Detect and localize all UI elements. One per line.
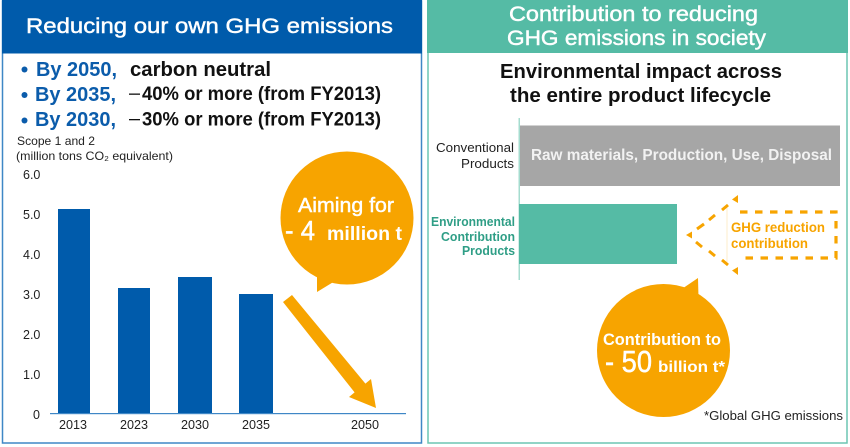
environmental contribution products bar bbox=[519, 204, 677, 264]
dashed arrow: GHG reduction contribution: GHG reduction bbox=[731, 219, 825, 235]
x axis labels bbox=[59, 418, 379, 432]
right panel heading: GHG emissions in society bbox=[507, 27, 767, 50]
callout: aiming for -4 million t: Aiming for bbox=[298, 195, 394, 217]
y axis labels: 0 bbox=[33, 408, 40, 422]
y axis labels: 5.0 bbox=[23, 208, 40, 222]
callout: contribution to -50 billion t: - 50 bbox=[605, 344, 652, 379]
dashed arrow: GHG reduction contribution: contribution bbox=[731, 235, 808, 251]
environmental contribution products label: Products bbox=[462, 244, 515, 258]
target list: By 2050, bbox=[36, 59, 117, 81]
callout: contribution to -50 billion t: billion t* bbox=[658, 359, 726, 376]
bar chart bbox=[23, 168, 406, 432]
right panel header band bbox=[427, 0, 848, 53]
y axis labels bbox=[23, 168, 40, 422]
left panel header band bbox=[2, 0, 422, 54]
conventional products label bbox=[436, 141, 514, 171]
target list bbox=[22, 59, 381, 131]
target list: By 2035, bbox=[35, 84, 116, 106]
chart unit label: Scope 1 and 2 bbox=[17, 134, 95, 148]
callout: contribution to -50 billion t bbox=[597, 278, 730, 417]
footnote: *Global GHG emissions bbox=[704, 409, 843, 423]
conventional products bar: Raw materials, Production, Use, Disposal bbox=[531, 147, 832, 164]
target list: 30% or more (from FY2013) bbox=[142, 110, 381, 130]
y axis labels: 4.0 bbox=[23, 248, 40, 262]
target list: carbon neutral bbox=[130, 59, 271, 81]
y axis labels: 1.0 bbox=[23, 368, 40, 382]
callout: aiming for -4 million t: - 4 bbox=[285, 215, 315, 246]
y axis labels: 3.0 bbox=[23, 288, 40, 302]
callout: aiming for -4 million t bbox=[280, 152, 414, 292]
lifecycle heading: the entire product lifecycle bbox=[510, 85, 771, 107]
right panel heading bbox=[507, 3, 767, 50]
x axis labels: 2030 bbox=[181, 418, 209, 432]
x axis labels: 2023 bbox=[120, 418, 148, 432]
lifecycle heading bbox=[500, 61, 782, 107]
target list: 40% or more (from FY2013) bbox=[142, 84, 381, 105]
x axis labels: 2013 bbox=[59, 418, 87, 432]
callout: aiming for -4 million t: million t bbox=[327, 224, 403, 245]
target list: By 2030, bbox=[35, 109, 116, 131]
x axis labels: 2050 bbox=[351, 418, 379, 432]
environmental contribution products label: Environmental bbox=[431, 215, 515, 229]
arrow: decline to 2050 bbox=[283, 295, 376, 408]
bars bbox=[58, 209, 273, 414]
right panel heading: Contribution to reducing bbox=[509, 3, 758, 26]
dashed arrow: GHG reduction contribution bbox=[686, 195, 836, 275]
conventional products label: Conventional bbox=[436, 141, 514, 155]
chart unit label bbox=[16, 134, 173, 163]
left panel heading: Reducing our own GHG emissions bbox=[26, 15, 393, 38]
lifecycle heading: Environmental impact across bbox=[500, 61, 782, 83]
environmental contribution products label bbox=[431, 215, 515, 258]
conventional products label: Products bbox=[461, 157, 514, 171]
environmental contribution products label: Contribution bbox=[441, 230, 515, 244]
panel: contribution to reducing GHG emissions in society bbox=[427, 0, 848, 443]
panel: reducing our own GHG emissions bbox=[2, 0, 422, 443]
y axis labels: 6.0 bbox=[23, 168, 40, 182]
y axis labels: 2.0 bbox=[23, 328, 40, 342]
conventional products bar bbox=[520, 126, 840, 186]
chart unit label: (million tons CO₂ equivalent) bbox=[16, 149, 173, 163]
lifecycle bar comparison bbox=[431, 118, 840, 280]
callout: contribution to -50 billion t: Contribution to bbox=[603, 330, 721, 349]
x axis labels: 2035 bbox=[242, 418, 270, 432]
